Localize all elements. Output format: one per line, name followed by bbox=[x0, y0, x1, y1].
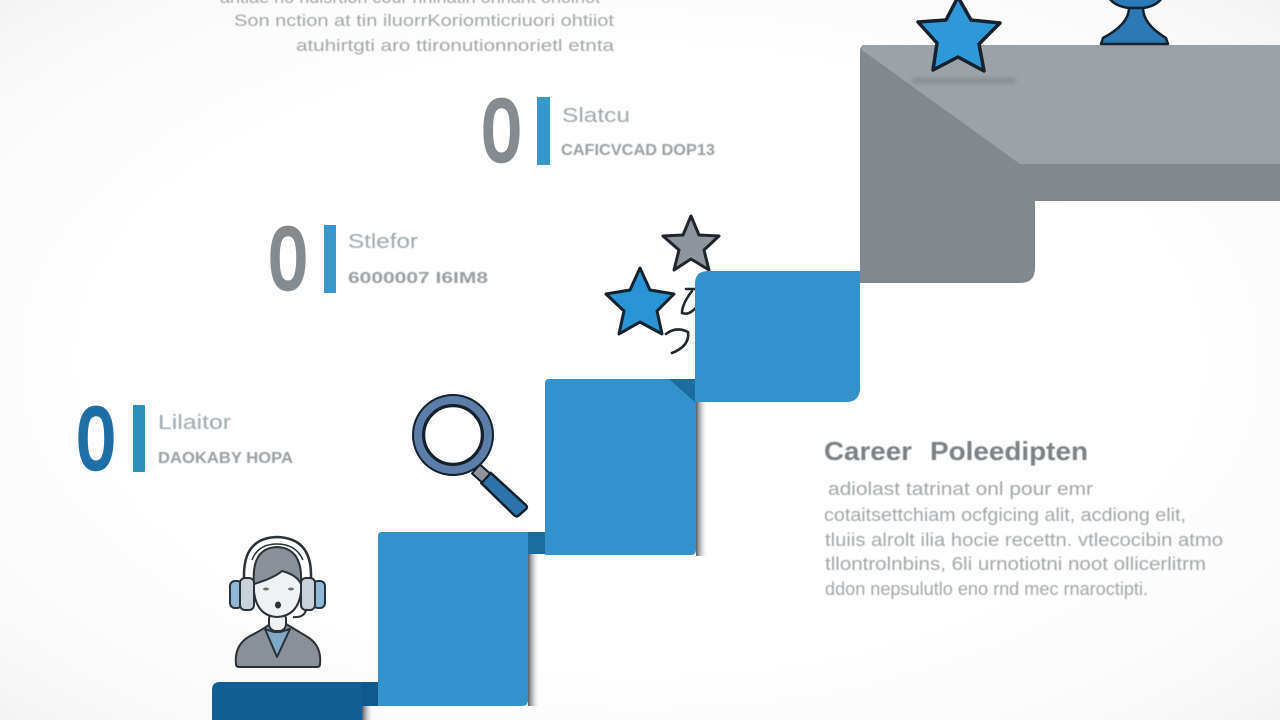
label title: Stlefor bbox=[348, 231, 418, 253]
panel: grey top step bbox=[860, 45, 1280, 283]
heading: career description: Poleedipten bbox=[930, 436, 1088, 466]
heading: career description bbox=[824, 436, 1088, 466]
star shadow bbox=[912, 78, 1016, 83]
number: 0 bbox=[270, 211, 306, 307]
step label 01 bbox=[78, 391, 293, 487]
step 1 bbox=[212, 682, 378, 720]
icon: climbing figure fragment bbox=[666, 289, 698, 353]
description text block: cotaitsettchiam ocfgicing alit, acdiong elit, bbox=[824, 505, 1186, 525]
step label 03 bbox=[482, 83, 715, 179]
icon: grey star bbox=[663, 216, 719, 270]
label caption: CAFICVCAD DOP13 bbox=[561, 142, 715, 159]
accent bar bbox=[537, 97, 550, 165]
description text block bbox=[824, 479, 1223, 599]
heading: career description: Career bbox=[824, 436, 912, 466]
description text block: adiolast tatrinat onl pour emr bbox=[828, 479, 1093, 499]
label title: Slatcu bbox=[562, 105, 630, 127]
icon: blue star on step bbox=[606, 268, 674, 334]
step 4 bbox=[695, 271, 860, 402]
step 3 bbox=[545, 379, 708, 556]
icon: blue star on top step bbox=[918, 0, 1000, 71]
description text block: tluiis alrolt ilia hocie recettn. vtlecocibin atmo bbox=[825, 530, 1223, 550]
accent bar bbox=[133, 405, 145, 472]
label caption: 6000007 I6IM8 bbox=[348, 270, 488, 287]
icon: person with headset bbox=[230, 537, 325, 667]
intro text block: atuhirtgti aro ttironutionnorietl etnta bbox=[296, 36, 615, 55]
label caption: DAOKABY HOPA bbox=[158, 450, 293, 467]
accent bar bbox=[324, 225, 336, 293]
icon: trophy bbox=[1101, 0, 1168, 44]
intro text block: Son nction at tin iluorrKoriomticriuori ohtiiot bbox=[234, 11, 614, 30]
top surface of grey step bbox=[862, 45, 1280, 164]
number: 0 bbox=[482, 83, 520, 179]
step label 02 bbox=[270, 211, 488, 307]
label title: Lilaitor bbox=[158, 412, 231, 434]
shaded notch bbox=[669, 379, 696, 403]
step 2 bbox=[378, 532, 545, 706]
icon: magnifying glass bbox=[418, 400, 527, 516]
description text block: tllontrolnbins, 6li urnotiotni noot ollicerlitrm bbox=[825, 554, 1206, 574]
intro text block bbox=[220, 0, 615, 55]
number: 0 bbox=[78, 391, 114, 487]
description text block: ddon nepsulutlo eno rnd mec rnaroctipti. bbox=[825, 579, 1148, 599]
